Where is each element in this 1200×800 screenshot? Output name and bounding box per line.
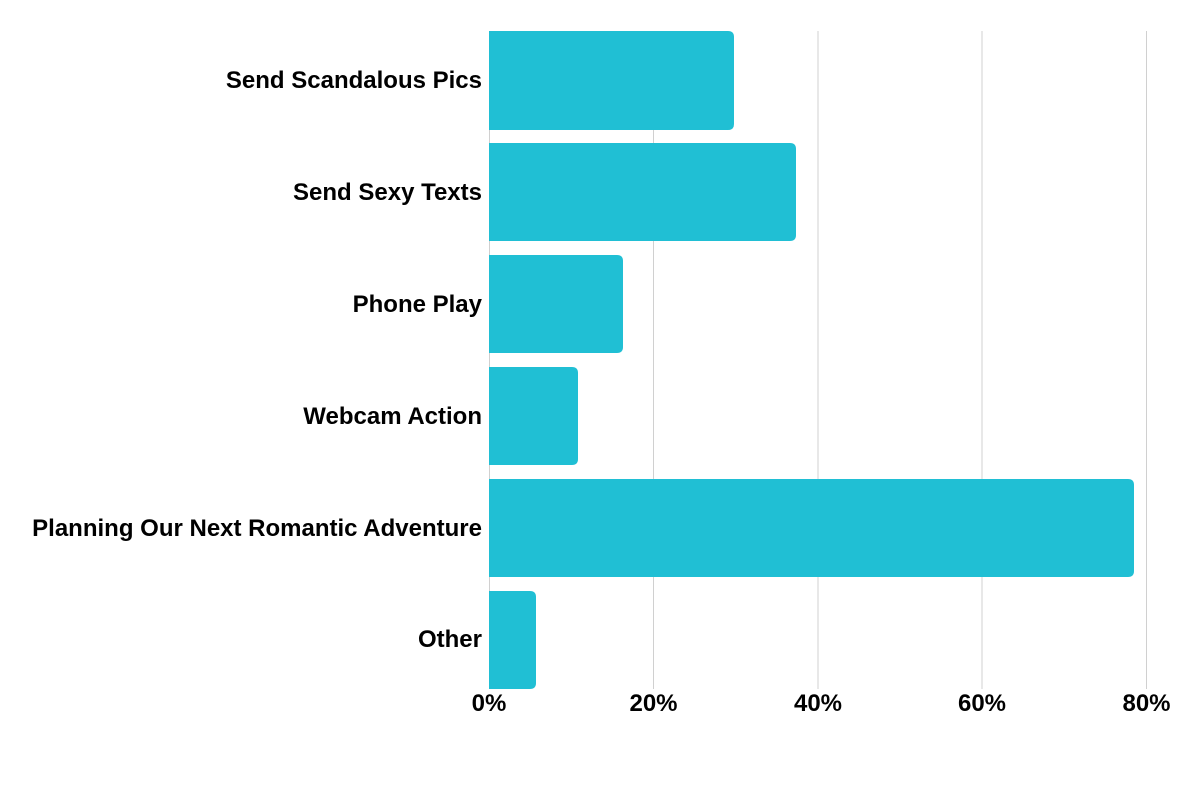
x axis labels: 80% [1122,690,1171,717]
x axis labels: 20% [629,690,678,717]
category labels: Send Sexy Texts [293,179,482,206]
bars [489,31,1134,689]
x axis labels [472,690,1171,717]
x axis labels: 0% [472,690,506,717]
x axis labels: 60% [958,690,1006,717]
category labels: Phone Play [353,291,483,318]
category labels: Webcam Action [303,403,482,430]
category labels [32,67,483,653]
category labels: Send Scandalous Pics [226,67,482,94]
category labels: Other [418,626,482,653]
x axis labels: 40% [794,690,842,717]
category labels: Planning Our Next Romantic Adventure [32,515,482,542]
